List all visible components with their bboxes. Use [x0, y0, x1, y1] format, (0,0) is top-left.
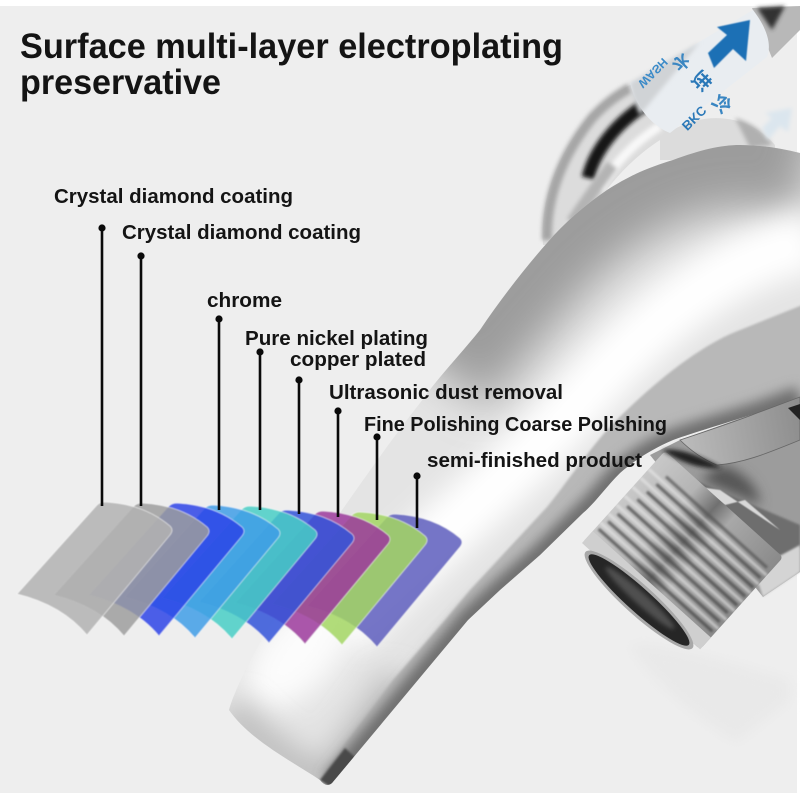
leader: crystal diamond coating 1 — [98, 224, 106, 506]
title — [20, 27, 563, 102]
pipe dark reflection — [588, 105, 645, 178]
blue arrow — [708, 20, 750, 68]
thread cylinder — [582, 451, 783, 649]
tip highlight — [243, 626, 346, 711]
sticker text: 冷 — [707, 88, 736, 117]
tip dark end — [319, 748, 355, 785]
tip lower shading — [229, 680, 400, 785]
layer: semi-finished product — [307, 514, 462, 647]
leader: chrome — [215, 315, 223, 510]
main spout body — [229, 145, 800, 785]
leader: semi-finished product — [413, 472, 421, 528]
layer: ultrasonic dust removal — [235, 511, 390, 644]
curved upper pipe — [543, 83, 672, 245]
label: pure nickel plating: Pure nickel plating — [245, 328, 428, 350]
upper grey shading — [440, 148, 800, 370]
leader: copper plated — [295, 376, 303, 514]
plating layer swatches — [17, 502, 462, 647]
label: fine and coarse polishing: Fine Polishing Coarse Polishing — [364, 414, 667, 436]
pipe bright inner reflection — [600, 126, 660, 190]
sticker small print — [635, 55, 710, 133]
sticker text — [668, 49, 736, 117]
label: ultrasonic dust removal: Ultrasonic dust removal — [329, 382, 563, 404]
layer: copper plated — [199, 510, 354, 643]
sticker text: 进 — [687, 66, 716, 95]
fitting body — [650, 397, 800, 597]
rear connector ball — [660, 118, 775, 160]
leader: ultrasonic dust removal — [334, 407, 342, 517]
sticker small print: WASH — [635, 55, 671, 91]
spout lens reflection — [680, 397, 800, 465]
title: Surface multi-layer electroplating — [20, 27, 563, 66]
layer: fine polishing — [272, 512, 427, 645]
label: semi-finished product: semi-finished product — [427, 450, 642, 472]
sticker text: 水 — [668, 49, 694, 75]
leader: pure nickel plating — [256, 348, 264, 510]
layer: crystal diamond coating first — [17, 502, 172, 635]
leader: crystal diamond coating 2 — [137, 252, 145, 506]
label: crystal diamond coating 2: Crystal diamond coating — [122, 222, 361, 244]
transparent sticker — [630, 10, 769, 133]
pipe beyond sticker — [752, 6, 800, 58]
layer: crystal diamond coating second — [54, 503, 209, 636]
label: chrome: chrome — [207, 290, 282, 312]
leader lines — [98, 224, 421, 528]
faucet photo — [200, 6, 800, 800]
fitting lower highlight — [745, 542, 800, 597]
leader: fine polishing — [373, 433, 381, 520]
layer: chrome — [125, 505, 280, 638]
thread opening — [575, 541, 703, 659]
fitting dark junction — [662, 449, 722, 468]
layer labels — [54, 186, 667, 472]
sticker small print: BKC — [679, 102, 710, 133]
pipe lower shading — [572, 165, 612, 222]
white highlight streak — [340, 240, 800, 630]
band dark outer edge — [332, 397, 800, 783]
label: copper plated: copper plated — [290, 349, 426, 371]
faint rear arrow — [762, 108, 792, 140]
fitting shadow — [700, 465, 760, 505]
label: crystal diamond coating 1: Crystal diamond coating — [54, 186, 293, 208]
lens dark spot — [788, 404, 800, 420]
pipe outer shading — [547, 88, 630, 240]
layer: pure nickel plating — [162, 506, 317, 639]
title: preservative — [20, 63, 221, 102]
layer: crystal diamond coating blue — [89, 503, 244, 636]
fitting textured strip — [690, 478, 800, 556]
lower grey band — [318, 300, 800, 800]
water spray shadow — [630, 644, 790, 742]
